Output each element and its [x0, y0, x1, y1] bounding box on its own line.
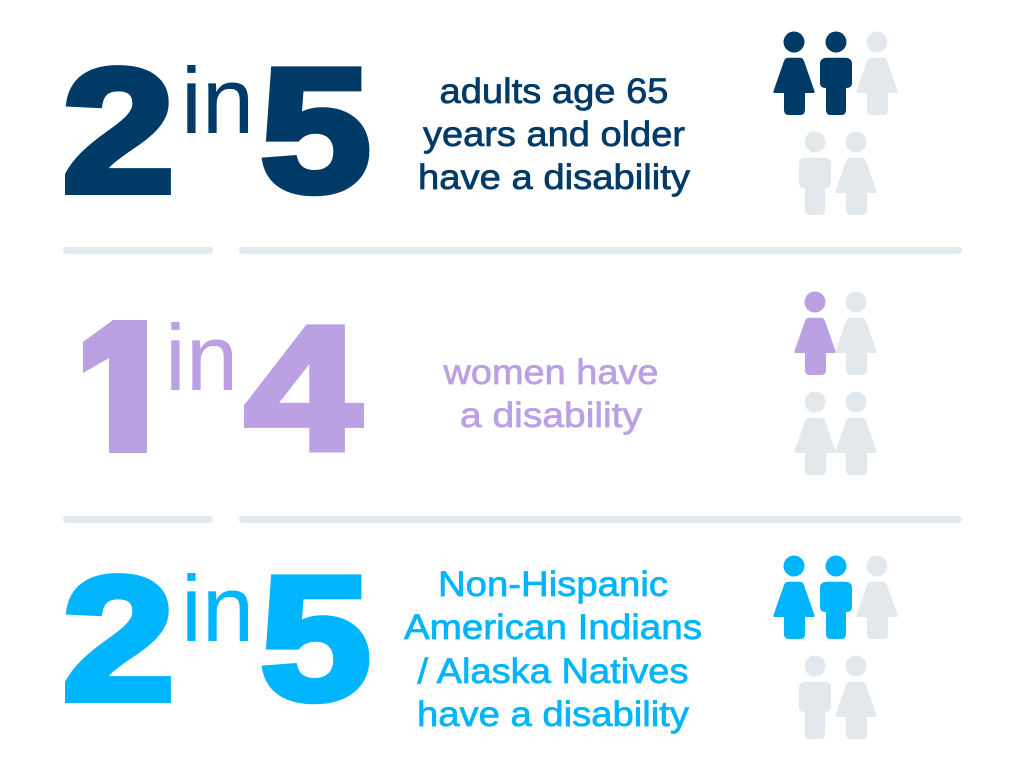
stat: 2 in 5 adults: [62, 33, 371, 230]
pictogram: 1 of 4 purple: [794, 292, 877, 475]
big number: 5: 5: [260, 33, 371, 229]
text: adults age 65 and older: [418, 72, 691, 197]
stat: 1 in 4 women: [83, 320, 364, 453]
word: in: in: [181, 48, 254, 153]
text: adults age 65 and older: adults age 65: [440, 72, 668, 111]
pictogram: 2 of 5 navy: [773, 32, 898, 215]
big number: 5: 5: [260, 541, 371, 737]
big number: 1: 1: [70, 291, 186, 487]
text: adults age 65 and older: years and older: [423, 115, 685, 154]
word: in: in: [181, 556, 254, 661]
word: in: in: [165, 305, 238, 410]
text: adults age 65 and older: have a disability: [418, 158, 691, 197]
text: Non-Hispanic American Indians / Alaska Natives: Non-Hispanic: [438, 565, 668, 604]
text: Non-Hispanic American Indians / Alaska Natives: American Indians: [404, 608, 702, 647]
text: women have a disability: a disability: [460, 396, 643, 435]
text: Non-Hispanic American Indians / Alaska Natives: have a disability: [417, 695, 690, 734]
pictogram: 2 of 5 cyan: [773, 556, 898, 739]
stat: 2 in 5 Native: [62, 541, 371, 738]
text: women have a disability: women have: [442, 353, 658, 392]
text: Non-Hispanic American Indians / Alaska Natives: [404, 565, 702, 734]
big number: 2: 2: [62, 34, 175, 230]
big number: 2: 2: [62, 542, 175, 738]
text: Non-Hispanic American Indians / Alaska Natives: / Alaska Natives: [418, 652, 688, 691]
text: women have a disability: [442, 353, 658, 435]
big number: 4: 4: [245, 291, 361, 487]
